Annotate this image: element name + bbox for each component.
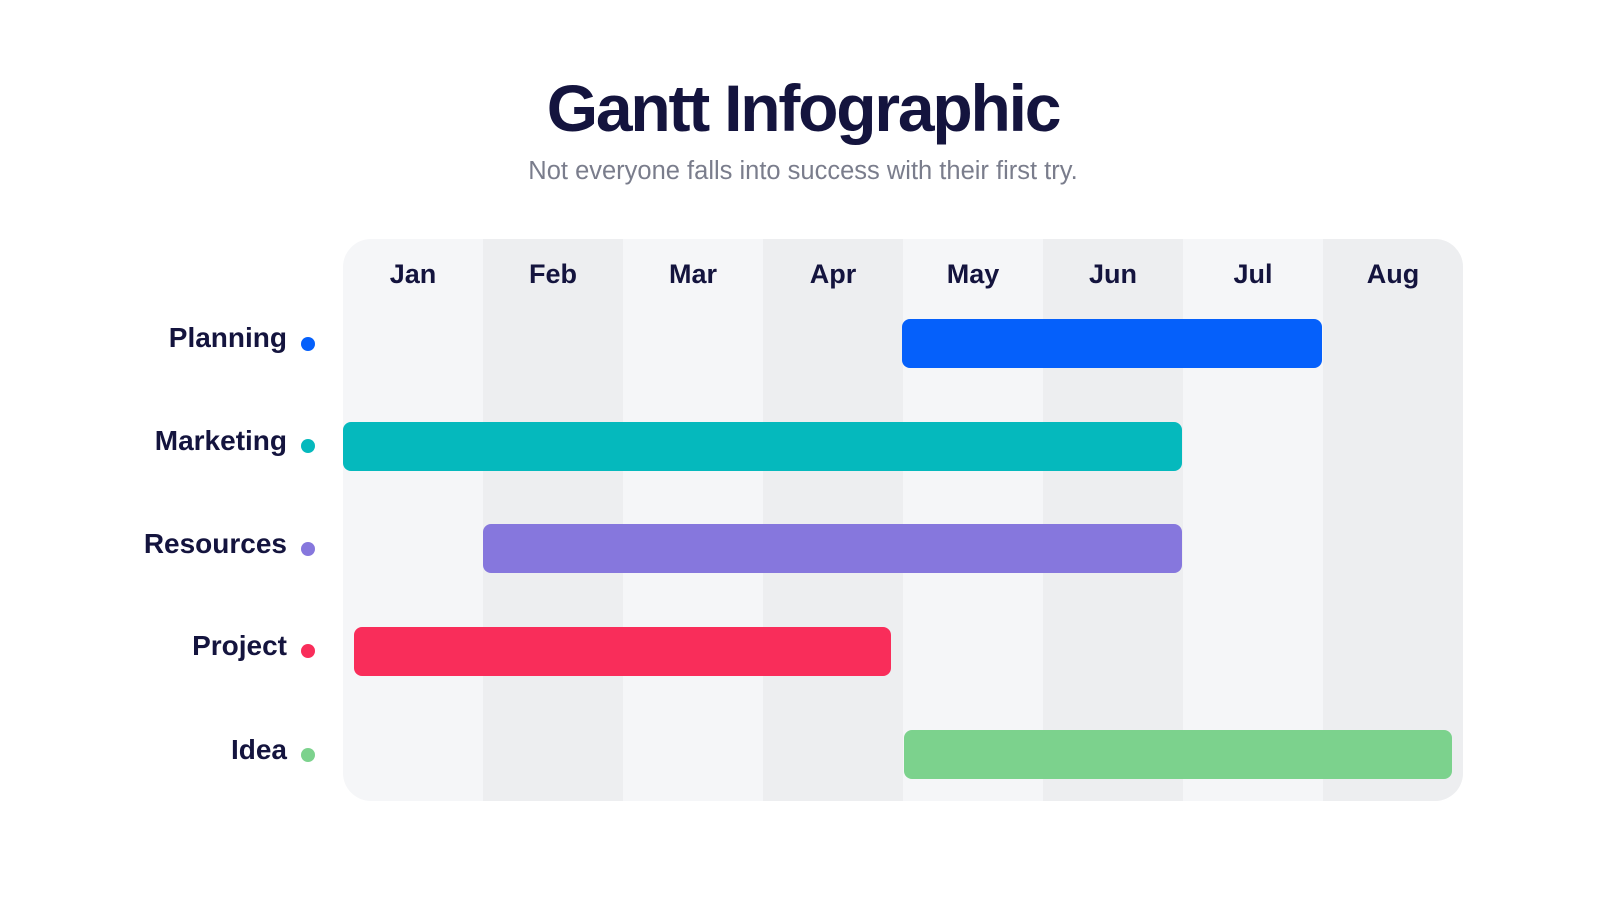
label: Project: Project xyxy=(192,630,287,661)
subtitle: Not everyone falls into success with their first try. xyxy=(528,157,1078,185)
bar: Project xyxy=(354,627,891,676)
month headers xyxy=(390,259,1419,289)
dot: Project xyxy=(301,644,315,658)
label: Resources: Resources xyxy=(144,528,287,559)
dot: Marketing xyxy=(301,439,315,453)
title: Gantt Infographic xyxy=(547,71,1059,145)
bar: Planning xyxy=(902,319,1322,368)
month headers: Apr xyxy=(810,259,856,289)
label: Planning: Planning xyxy=(169,322,287,353)
dot: Idea xyxy=(301,748,315,762)
label: Idea: Idea xyxy=(231,734,287,765)
month headers: Jun xyxy=(1089,259,1137,289)
month headers: Jan xyxy=(390,259,436,289)
dot: Planning xyxy=(301,337,315,351)
month headers: Mar xyxy=(669,259,717,289)
bar: Marketing xyxy=(343,422,1182,471)
chart panel xyxy=(343,239,1463,801)
month headers: Aug xyxy=(1367,259,1419,289)
bar: Idea xyxy=(904,730,1452,779)
label: Marketing: Marketing xyxy=(155,425,287,456)
month headers: May xyxy=(947,259,999,289)
month headers: Feb xyxy=(529,259,577,289)
bar: Resources xyxy=(483,524,1182,573)
dot: Resources xyxy=(301,542,315,556)
month headers: Jul xyxy=(1233,259,1272,289)
